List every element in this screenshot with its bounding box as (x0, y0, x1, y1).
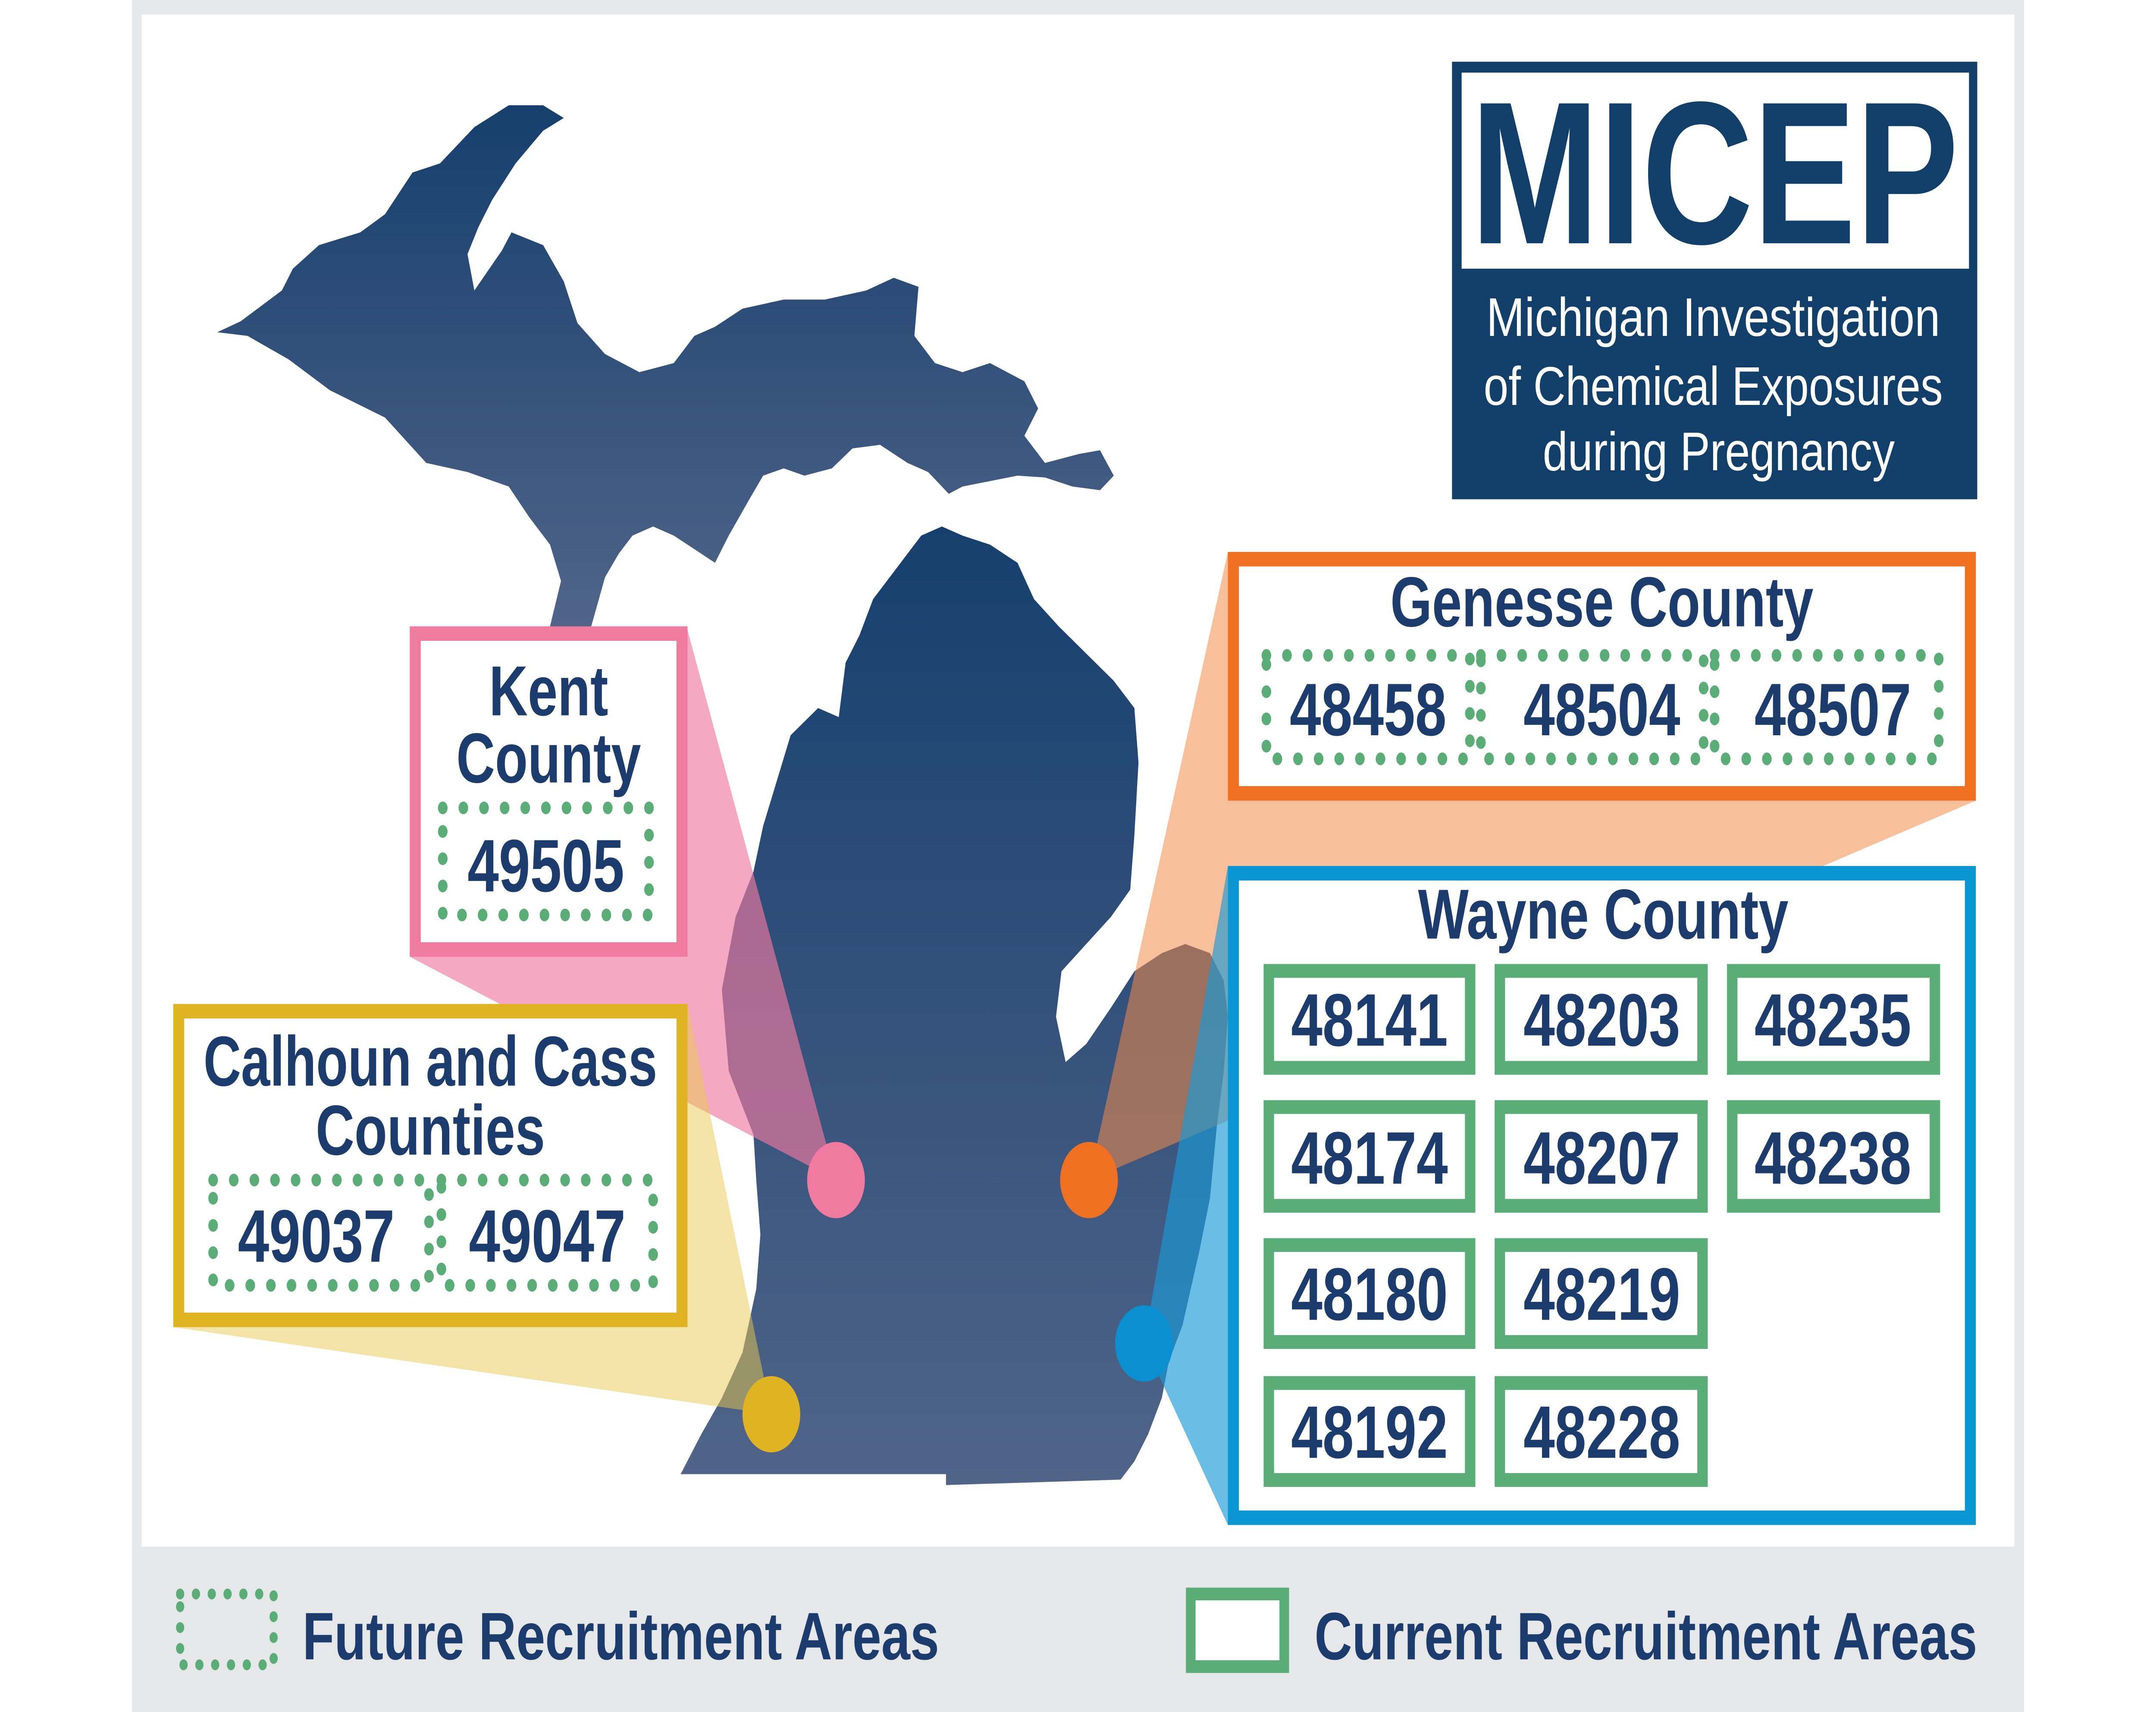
panel: Kent County (415, 633, 682, 950)
panel: Wayne County: 48228 (1523, 1391, 1680, 1474)
panel: Calhoun and Cass Counties: Calhoun and Cass (204, 1022, 657, 1101)
panel: Calhoun and Cass Counties (179, 1011, 682, 1320)
panel: Wayne County: 48219 (1523, 1253, 1680, 1336)
legend: current recruitment areas: Current Recruitment Areas (1314, 1599, 1977, 1674)
marker: pink dot (807, 1142, 865, 1218)
panel: Wayne County: 48192 (1291, 1391, 1448, 1474)
panel: Wayne County: 48238 (1755, 1116, 1911, 1200)
panel: Genesse County (1233, 559, 1971, 793)
panel: Genesse County: 48458 (1290, 668, 1447, 751)
panel: Wayne County: 48207 (1523, 1116, 1680, 1200)
panel: Wayne County: 48174 (1291, 1116, 1448, 1200)
panel: Wayne County: 48141 (1291, 978, 1448, 1062)
legend: future recruitment areas: Future Recruitment Areas (303, 1599, 939, 1674)
panel: Wayne County (1233, 873, 1971, 1518)
logo: MICEP: during Pregnancy (1543, 421, 1895, 482)
panel: Genesse County: 48504 (1523, 668, 1680, 751)
panel: Kent County: 49505 (467, 825, 624, 907)
panel: Wayne County: 48235 (1755, 978, 1911, 1062)
map: Michigan (217, 105, 1228, 1485)
panel: Calhoun and Cass Counties: 49047 (469, 1195, 626, 1278)
marker: yellow dot (743, 1376, 800, 1452)
logo: MICEP: MICEP (1470, 59, 1959, 286)
panel: Kent County: Kent (489, 651, 608, 731)
logo: MICEP (1452, 59, 1977, 499)
marker: blue dot (1115, 1305, 1173, 1382)
panel: Genesse County: Genesse County (1390, 562, 1814, 641)
panel: Calhoun and Cass Counties: Counties (316, 1091, 545, 1170)
logo: MICEP: of Chemical Exposures (1484, 356, 1943, 417)
connector: pink to Kent (410, 630, 836, 1180)
panel: Wayne County: Wayne County (1418, 875, 1789, 954)
marker: orange dot (1060, 1142, 1118, 1218)
panel: Kent County: County (456, 718, 641, 797)
connector: blue to Wayne (1144, 866, 1228, 1525)
panel: Genesse County: 48507 (1755, 668, 1911, 751)
panel: Wayne County: 48180 (1291, 1253, 1448, 1336)
connector: yellow to Calhoun and Cass (173, 1004, 771, 1414)
logo: MICEP: Michigan Investigation (1486, 287, 1940, 348)
panel: Calhoun and Cass Counties: 49037 (238, 1195, 395, 1278)
connector: orange to Genesse (1089, 552, 1976, 1180)
panel: Wayne County: 48203 (1523, 978, 1680, 1062)
